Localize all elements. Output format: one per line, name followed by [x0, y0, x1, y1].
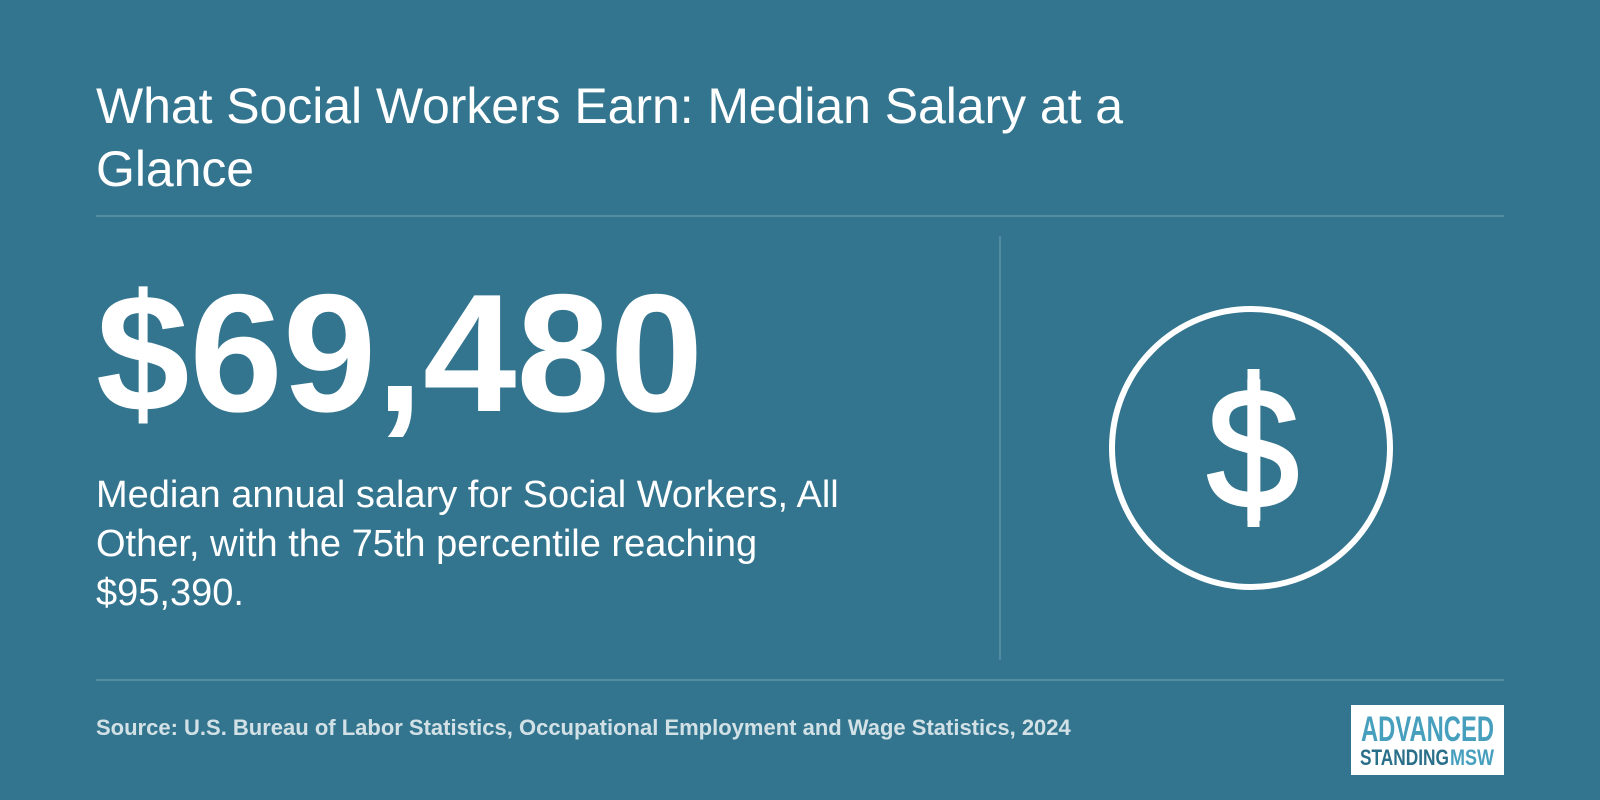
- logo: Advanced Standing MSW: [1351, 705, 1504, 775]
- logo: Advanced Standing MSW: STANDING: [1360, 745, 1449, 770]
- source line: Source: U.S. Bureau of Labor Statistics, Occupational Employment and Wage Statistics, 2024: [96, 715, 1071, 740]
- icon: dollar sign in circle: [1109, 306, 1393, 590]
- big number: median salary: $69,480: [96, 259, 703, 447]
- description text: Median annual salary for Social Workers, All Other, with the 75th percentile reaching $95,390.: [96, 474, 839, 614]
- logo: Advanced Standing MSW: MSW: [1450, 745, 1494, 770]
- title: What Social Workers Earn: Median Salary at a Glance: [96, 78, 1123, 197]
- icon: dollar sign in circle: $: [1207, 352, 1299, 544]
